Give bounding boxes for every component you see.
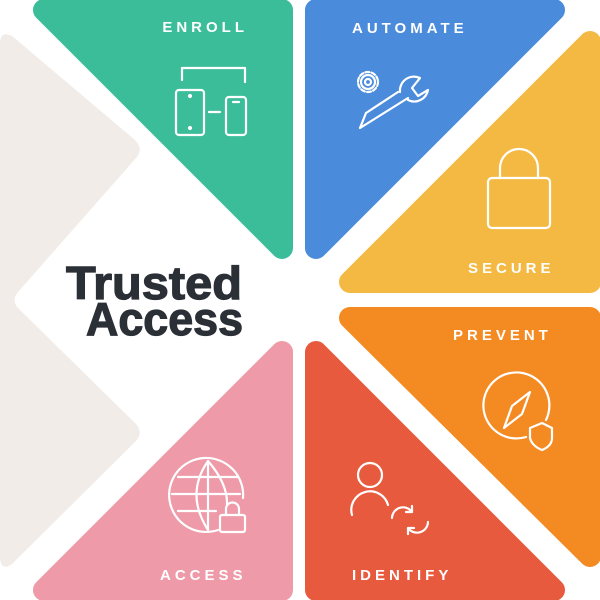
panel: prevent (350, 318, 590, 556)
heading: automate: AUTOMATE (352, 20, 468, 37)
icon: user sync (351, 463, 428, 534)
panel: enroll (44, 10, 282, 248)
icon: devices (176, 68, 246, 135)
heading: enroll: ENROLL (162, 19, 248, 36)
panel: identify (316, 352, 554, 590)
panel: secure (350, 42, 590, 282)
title: Trusted (66, 257, 242, 309)
panel: grey chevron (0, 34, 140, 567)
heading: access: ACCESS (160, 567, 247, 584)
title (66, 257, 243, 345)
heading: identify: IDENTIFY (352, 567, 452, 584)
heading: prevent: PREVENT (453, 327, 552, 344)
panel: access (44, 352, 282, 590)
title: Access (86, 293, 243, 345)
heading: secure: SECURE (468, 260, 555, 277)
icon: gear wrench (358, 72, 428, 128)
panel: automate (316, 10, 554, 248)
icon: compass shield (483, 372, 552, 450)
icon: padlock (488, 149, 550, 228)
icon: globe lock (169, 458, 245, 532)
